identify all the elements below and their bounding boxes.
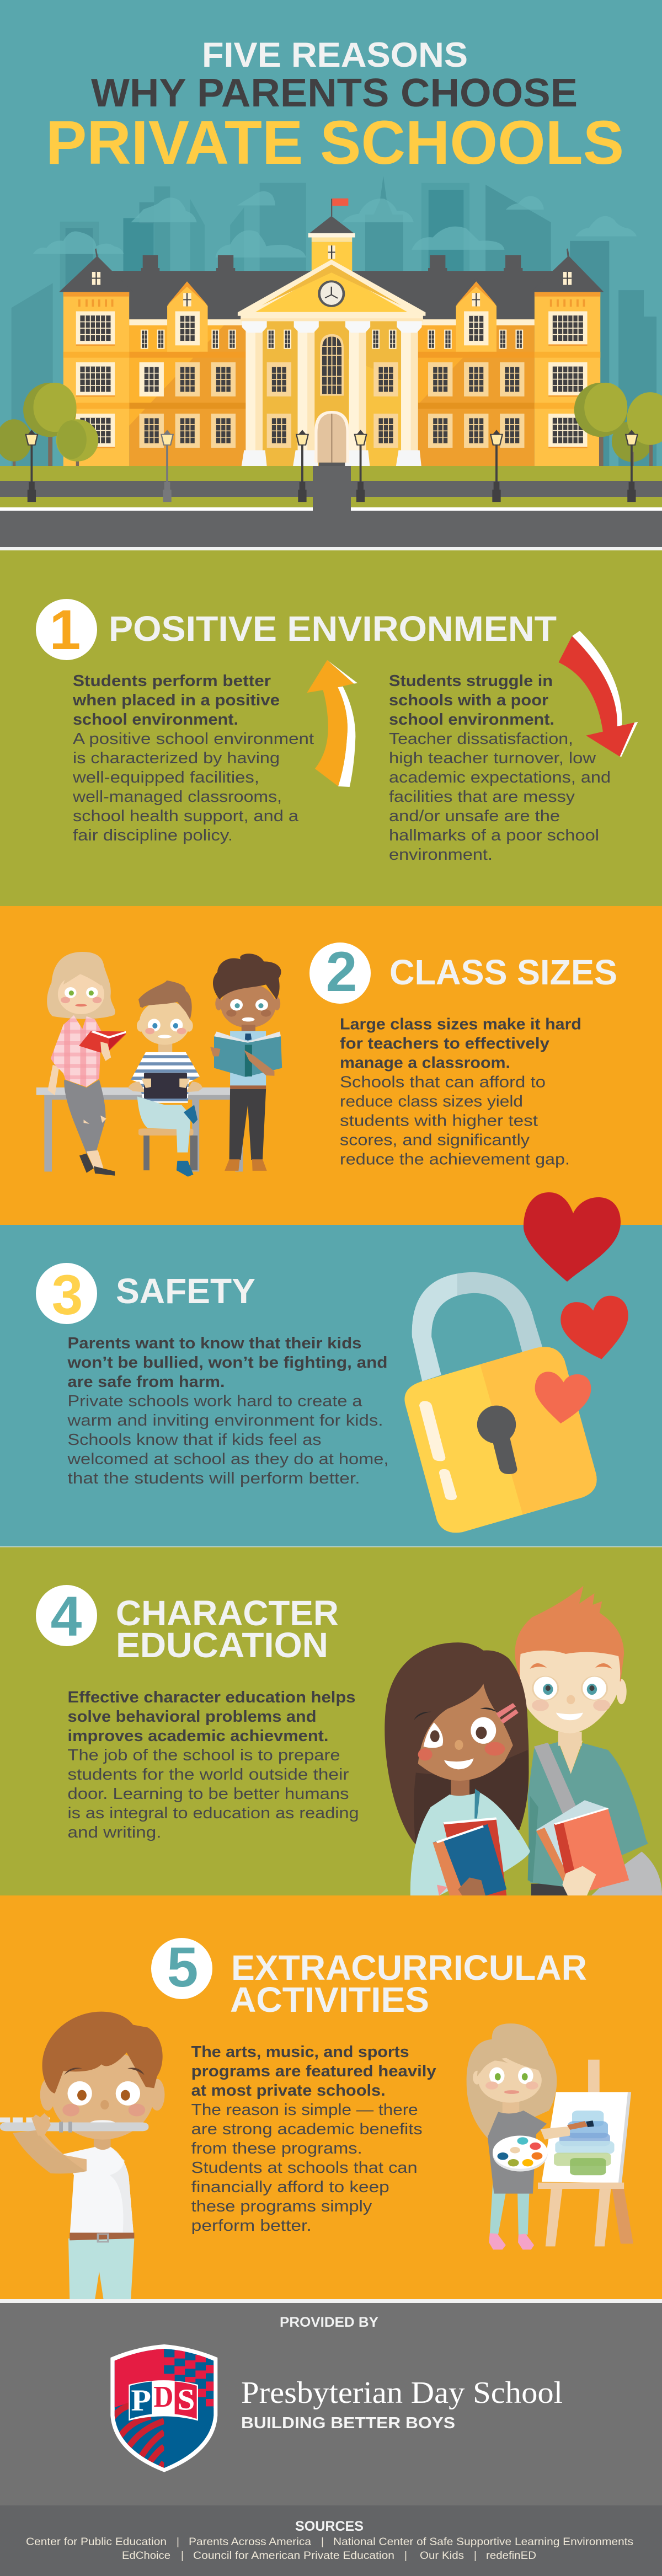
text: positive school environment: school health support, and a [73, 807, 299, 825]
text: activities body: The reason is simple — there [191, 2101, 418, 2119]
logo: PDS shield [110, 2344, 217, 2472]
text: positive school environment: fair discipline policy. [73, 827, 233, 844]
text: class sizes body: Large class sizes make it hard [340, 1016, 581, 1033]
text: character education body [67, 1689, 359, 1841]
heading: ACTIVITIES [230, 1980, 429, 2020]
heading: CLASS SIZES [389, 952, 617, 992]
panel: sources [0, 2505, 662, 2576]
sources list: Council for American Private Education [193, 2550, 394, 2562]
text: safety body [67, 1335, 389, 1487]
text: poor school environment: academic expectations, and [389, 769, 611, 786]
text: class sizes body: scores, and significantly [340, 1132, 530, 1149]
main roof [112, 271, 553, 320]
text: activities body: these programs simply [191, 2198, 372, 2215]
keyhole [477, 1406, 517, 1474]
number badge 3: 3 [52, 1263, 83, 1326]
text: positive school environment: Students perform better [73, 672, 271, 690]
text: positive school environment: well-managed classrooms, [72, 788, 282, 806]
heading: CHARACTER [116, 1593, 339, 1633]
text: safety body: won’t be bullied, won’t be fighting, and [67, 1354, 387, 1372]
towers [63, 292, 129, 466]
palette [493, 2135, 548, 2171]
text: safety body: welcomed at school as they do at home, [67, 1450, 388, 1468]
sources list: | [177, 2536, 179, 2548]
text: poor school environment: high teacher turnover, low [389, 749, 596, 767]
heading: SAFETY [116, 1271, 255, 1311]
windows [76, 311, 115, 346]
text: character education body: students for the world outside their [67, 1766, 349, 1784]
painting on canvas [554, 2111, 615, 2175]
illustration: two students with books [385, 1586, 662, 1896]
text: class sizes body: students with higher test [340, 1112, 538, 1129]
title: FIVE REASONS [202, 36, 468, 74]
number badge 1: 1 [50, 598, 81, 661]
text: character education body: is as integral to education as reading [67, 1804, 359, 1822]
icon: heart on lock [535, 1372, 591, 1423]
text: positive school environment: well-equipped facilities, [72, 769, 259, 786]
number badge 1 [36, 598, 97, 661]
sources list: redefinED [486, 2550, 536, 2562]
sources list: | [474, 2550, 477, 2562]
text: activities body [191, 2043, 436, 2235]
text: class sizes body [340, 1016, 581, 1168]
panel: 4 character education [0, 1546, 662, 1896]
arrow: down red [558, 631, 638, 757]
icon: medium heart [560, 1296, 628, 1359]
girl with dark hair [385, 1642, 530, 1896]
sources list: National Center of Safe Supportive Learning Environments [333, 2536, 633, 2548]
text: activities body: programs are featured heavily [191, 2063, 436, 2080]
number badge 2 [309, 940, 371, 1004]
heading [230, 1948, 587, 2020]
girl with red book [47, 952, 126, 1176]
central portico [246, 321, 418, 466]
icon: large heart [524, 1192, 621, 1282]
text: character education body: The job of the school is to prepare [67, 1747, 340, 1764]
arrow: up orange [307, 660, 357, 787]
text: character education body: Effective character education helps [67, 1689, 355, 1706]
sources list: | [404, 2550, 407, 2562]
icon: padlock with hearts [404, 1272, 628, 1533]
text: positive school environment: when placed in a positive [72, 692, 280, 709]
boy with teal book [210, 954, 282, 1171]
clock [318, 280, 345, 307]
text: poor school environment [389, 672, 611, 864]
easel [538, 2060, 633, 2246]
wings [129, 319, 246, 466]
painter girl [467, 2023, 594, 2250]
logo: PDS shield: P [131, 2384, 151, 2417]
boy with orange hair [512, 1586, 662, 1896]
arched window [320, 334, 344, 396]
logo: PDS shield: S [178, 2382, 195, 2416]
boy with tablet [128, 981, 202, 1177]
illustration: boy playing flute [0, 2012, 164, 2299]
text: safety body: are safe from harm. [67, 1373, 225, 1391]
text: character education body: door. Learning to be better humans [67, 1785, 349, 1803]
number badge 5 [151, 1936, 212, 1999]
text: safety body: Parents want to know that their kids [67, 1335, 362, 1352]
title [46, 36, 624, 177]
panel: 3 safety [36, 1192, 628, 1533]
text: activities body: are strong academic benefits [191, 2120, 423, 2138]
text: activities body: The arts, music, and sports [191, 2043, 409, 2061]
text: activities body: from these programs. [191, 2140, 362, 2157]
heading [116, 1593, 339, 1665]
text: activities body: perform better. [191, 2217, 312, 2235]
panel: hero header [0, 0, 662, 550]
text: class sizes body: reduce the achievement gap. [340, 1150, 570, 1168]
text: class sizes body: for teachers to effectively [340, 1035, 549, 1052]
tagline: BUILDING BETTER BOYS [241, 2414, 455, 2432]
illustration: three students at a table [36, 952, 282, 1177]
text: activities body: Students at schools that can [191, 2159, 418, 2177]
text: poor school environment: Teacher dissatisfaction, [389, 730, 573, 748]
illustration: girl painting at easel [467, 2023, 633, 2250]
panel: 1 positive environment [0, 550, 662, 906]
text: poor school environment: hallmarks of a poor school [389, 827, 599, 844]
heading: EXTRACURRICULAR [231, 1948, 587, 1988]
text: class sizes body: Schools that can afford to [340, 1073, 546, 1091]
text: safety body: that the students will perform better. [67, 1470, 360, 1487]
text: poor school environment: Students struggle in [389, 672, 553, 690]
text: positive school environment: is characterized by having [73, 749, 280, 767]
number badge 5: 5 [167, 1936, 198, 1999]
text: positive school environment: A positive school environment [73, 730, 314, 748]
school name: Presbyterian Day School [241, 2376, 563, 2410]
heading: EDUCATION [116, 1625, 328, 1665]
panel: 5 extracurricular activities [0, 1895, 662, 2299]
city skyline background [12, 176, 656, 466]
panel: provided by footer [0, 2299, 662, 2505]
text: safety body: warm and inviting environment for kids. [67, 1412, 383, 1429]
text: character education body: solve behavioral problems and [67, 1708, 317, 1726]
heading: provided by: PROVIDED BY [280, 2315, 378, 2330]
text: poor school environment: and/or unsafe are the [389, 807, 560, 825]
padlock body [404, 1347, 597, 1533]
trees [48, 419, 52, 466]
sources list: | [181, 2550, 184, 2562]
title: PRIVATE SCHOOLS [46, 108, 624, 177]
number badge 3 [36, 1263, 97, 1326]
number badge 4: 4 [51, 1585, 82, 1648]
sources list: EdChoice [122, 2550, 170, 2562]
text: class sizes body: reduce class sizes yield [340, 1093, 523, 1111]
logo: PDS shield: D [153, 2380, 173, 2413]
text: activities body: financially afford to keep [191, 2178, 389, 2196]
text: poor school environment: facilities that are messy [389, 788, 575, 806]
illustration: school building [0, 199, 662, 466]
heading: sources: SOURCES [295, 2519, 364, 2534]
table [36, 1088, 243, 1171]
text: class sizes body: manage a classroom. [340, 1054, 510, 1072]
cupola [312, 242, 352, 274]
chimneys [141, 255, 522, 272]
sources list [26, 2536, 633, 2562]
padlock shackle [412, 1272, 542, 1381]
sources list: | [321, 2536, 324, 2548]
text: safety body: Schools know that if kids feel as [67, 1431, 321, 1449]
text: safety body: Private schools work hard to create a [67, 1393, 362, 1410]
text: positive school environment [72, 672, 314, 844]
title: WHY PARENTS CHOOSE [91, 71, 578, 115]
text: poor school environment: school environment. [389, 711, 554, 729]
text: character education body: and writing. [67, 1824, 161, 1841]
text: poor school environment: environment. [389, 846, 493, 864]
heading: POSITIVE ENVIRONMENT [109, 609, 557, 649]
number badge 2: 2 [326, 940, 357, 1003]
door [314, 411, 349, 463]
columns [245, 327, 263, 457]
text: poor school environment: schools with a poor [389, 692, 548, 709]
sources list: Our Kids [420, 2550, 464, 2562]
number badge 4 [36, 1585, 97, 1648]
dormers [167, 281, 208, 352]
street lamps [26, 430, 638, 502]
panel: 2 class sizes [0, 906, 662, 1225]
grounds and road [0, 466, 662, 550]
text: activities body: at most private schools. [191, 2082, 386, 2100]
pediment [238, 260, 425, 316]
sources list: Center for Public Education [26, 2536, 167, 2548]
text: character education body: improves academic achievment. [67, 1727, 329, 1745]
text: positive school environment: school environment. [73, 711, 238, 729]
sources list: Parents Across America [189, 2536, 311, 2548]
